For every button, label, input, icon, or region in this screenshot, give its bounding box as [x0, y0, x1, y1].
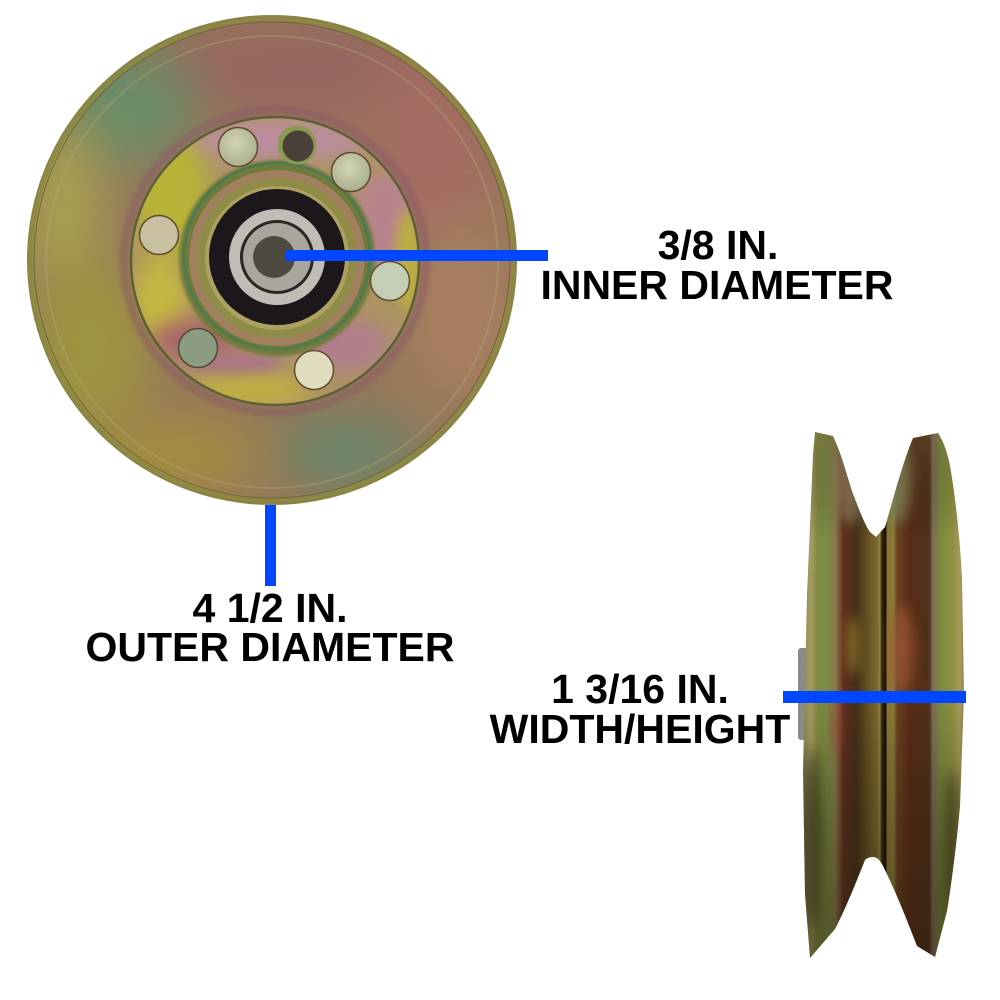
label: outer diameter: [86, 585, 454, 670]
blue line: width/height: [783, 691, 966, 703]
bearing: [209, 189, 345, 325]
outer disc colour tarnish: [20, 10, 530, 510]
inner flange shadow ring: [124, 110, 426, 412]
label: width/height: [490, 666, 790, 752]
inner flange: [130, 116, 420, 406]
label: width/height: WIDTH/HEIGHT: [490, 706, 790, 752]
blue line: outer diameter: [265, 505, 276, 586]
label: inner diameter: [540, 222, 894, 308]
label: outer diameter: 4 1/2 IN.: [193, 585, 347, 631]
pulley front view: [20, 10, 530, 510]
hub dome: [179, 160, 375, 356]
rivets: [140, 128, 410, 390]
pulley side view: [795, 425, 970, 965]
label: width/height: 1 3/16 IN.: [551, 666, 729, 712]
label: outer diameter: OUTER DIAMETER: [86, 624, 454, 670]
label: inner diameter: 3/8 IN.: [658, 222, 778, 268]
blue line: inner diameter: [285, 250, 548, 261]
mounting hole: [278, 126, 316, 164]
axle stub: [798, 648, 808, 740]
side body: [803, 432, 964, 958]
outer disc rim: [27, 15, 517, 505]
label: inner diameter: INNER DIAMETER: [540, 262, 894, 308]
